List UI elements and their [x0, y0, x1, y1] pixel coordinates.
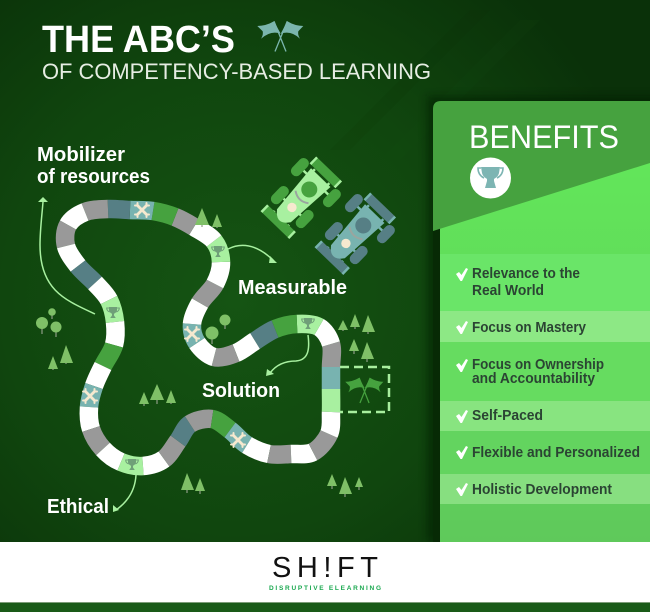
benefit list text: Real World: [472, 282, 544, 299]
arrow: to Solution: [266, 335, 309, 376]
finish dashed box: [340, 367, 389, 412]
arrow: to Ethical: [113, 475, 136, 512]
label: Ethical: Ethical: [47, 496, 109, 518]
title: THE ABC’S: [42, 19, 235, 61]
benefit list text: [472, 265, 640, 498]
car: light green: [255, 150, 349, 244]
icon: trophy badge: [470, 158, 511, 198]
check marks: [456, 268, 468, 496]
label: Measurable: Measurable: [238, 277, 347, 299]
logo: SHIFT: DISRUPTIVE ELEARNING: [269, 585, 381, 592]
title: [42, 19, 431, 84]
panel header: [433, 101, 650, 231]
footer band: [0, 542, 650, 612]
icon: crossed flags green: [345, 378, 383, 403]
label: Mobilizer of resources: Mobilizer: [37, 144, 125, 166]
benefit list text: Holistic Development: [472, 481, 612, 498]
icons: trophies on track: [107, 246, 314, 470]
benefit list text: Flexible and Personalized: [472, 444, 640, 461]
label: Mobilizer of resources: of resources: [37, 166, 150, 188]
label: Solution: Solution: [202, 380, 280, 402]
panel: benefits: [427, 96, 650, 542]
arrow: to Measurable: [228, 245, 277, 263]
trees: [36, 208, 375, 497]
panel body: [440, 160, 650, 542]
benefit rows: [440, 254, 650, 504]
icon: crossed flags teal: [257, 21, 303, 52]
benefit list text: Focus on Ownership: [472, 356, 604, 373]
game track: [65, 209, 332, 466]
label: Mobilizer of resources: [37, 144, 150, 188]
benefit list text: Relevance to the: [472, 265, 580, 282]
benefit list text: Self-Paced: [472, 407, 543, 424]
logo: SHIFT: SH!FT: [272, 552, 378, 584]
icons: wrenches on track: [83, 203, 245, 447]
arrow: to Mobilizer: [38, 197, 95, 314]
title: OF COMPETENCY-BASED LEARNING: [42, 59, 431, 84]
benefit list text: Focus on Mastery: [472, 319, 587, 336]
benefit list text: and Accountability: [472, 370, 596, 387]
heading: BENEFITS: [469, 119, 619, 155]
car: teal: [309, 186, 403, 280]
